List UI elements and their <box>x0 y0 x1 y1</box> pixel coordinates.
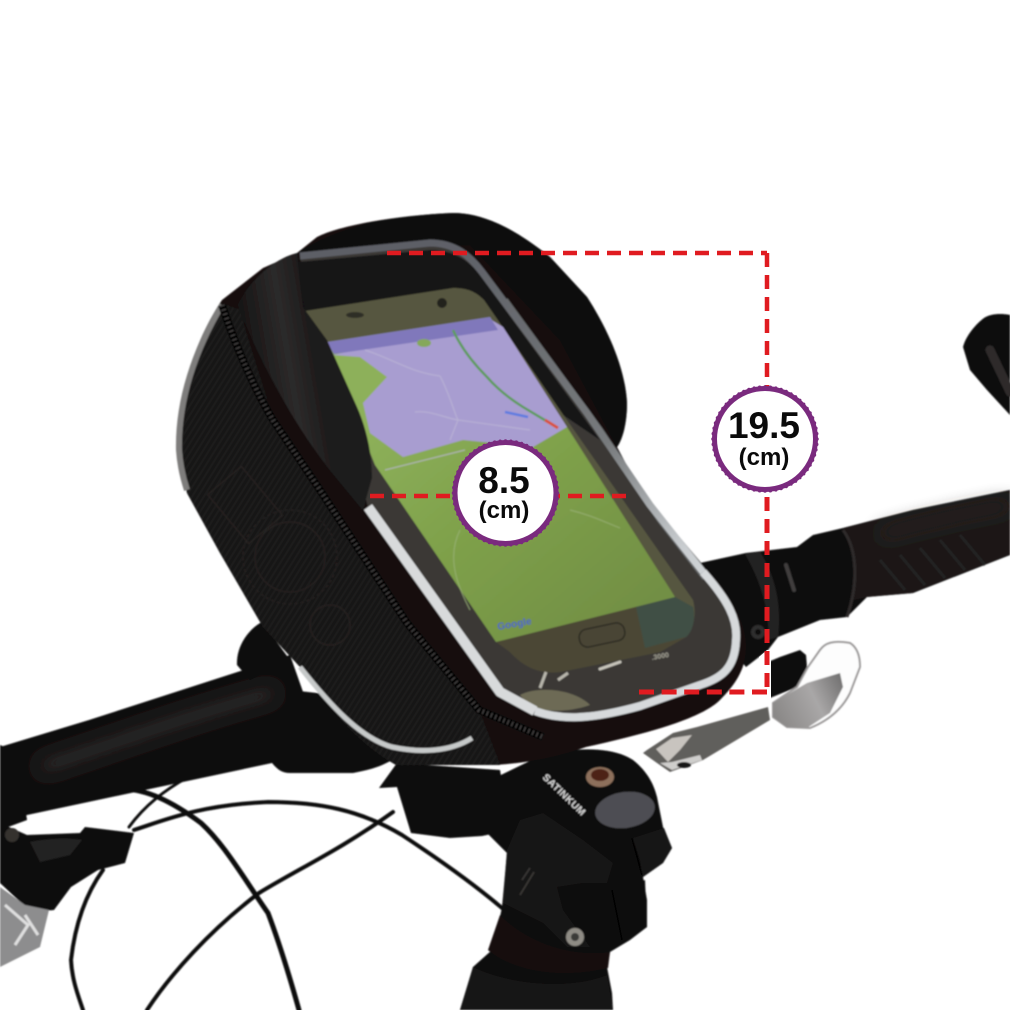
embossed logo <box>208 466 350 645</box>
stem engraved text <box>520 868 534 895</box>
window interior <box>300 245 733 713</box>
badge: width 8.5 cm: 8.5 <box>478 460 530 501</box>
stem bolt <box>566 928 584 946</box>
stem upper clamp <box>633 828 672 877</box>
badge: width 8.5 cm: (cm) <box>479 497 529 524</box>
stem cap disc <box>593 788 657 832</box>
blue route <box>505 412 528 417</box>
stem neck <box>488 915 610 973</box>
google logo: Google <box>497 616 533 633</box>
red route <box>545 420 558 428</box>
badge: width 8.5 cm <box>454 441 558 545</box>
grip highlight <box>880 505 1010 535</box>
bag body <box>177 213 746 765</box>
stem lower clamp <box>610 880 647 940</box>
front camera <box>437 298 447 308</box>
faint green roads <box>454 510 620 610</box>
phone body <box>305 288 695 672</box>
dark mesh above phone <box>298 250 600 440</box>
stem brand text: SATINKUM <box>540 772 587 819</box>
grip <box>843 490 1010 600</box>
window right shine <box>505 300 705 578</box>
right brake lever end <box>963 314 1010 415</box>
green route <box>453 330 548 422</box>
silver lever arm <box>643 707 770 772</box>
earpiece <box>346 312 364 318</box>
map water area <box>333 319 567 457</box>
brake cables <box>71 777 502 1010</box>
phone text mark: .3000 <box>651 652 670 662</box>
map roads <box>365 350 530 470</box>
left mount knob <box>237 622 290 680</box>
phone speaker glint <box>600 662 620 669</box>
phone chin right <box>636 597 694 648</box>
badge: height 19.5 cm: 19.5 <box>728 405 800 446</box>
window reflection debris <box>520 690 590 711</box>
phone bottom chin <box>496 597 694 672</box>
bottom reflective stripe <box>300 667 472 750</box>
mount strap below bag <box>379 763 510 838</box>
phone bag <box>177 213 746 765</box>
sun visor <box>300 213 627 447</box>
stem arm <box>503 813 613 947</box>
zipper <box>222 305 543 737</box>
left handlebar <box>0 655 320 825</box>
left side highlight <box>179 305 222 490</box>
window rim <box>300 243 736 717</box>
height dimension bracket <box>387 251 767 255</box>
collar ring <box>843 530 855 617</box>
left brake shifter <box>0 823 134 967</box>
phone side glint <box>540 672 568 688</box>
phone <box>305 288 695 688</box>
photo: bicycle handlebar with phone bag <box>0 213 1010 1010</box>
status bar <box>327 317 498 354</box>
grip texture <box>880 535 985 590</box>
clamp knob highlight <box>786 565 794 590</box>
top strap <box>238 253 372 510</box>
screen <box>327 317 675 642</box>
handlebar left ring <box>0 745 27 830</box>
white gap beside lever <box>757 650 771 702</box>
right handlebar and grip <box>700 490 1010 667</box>
black brake lever <box>768 650 807 698</box>
silver brake lever <box>773 642 860 728</box>
badge: height 19.5 cm: (cm) <box>739 444 789 471</box>
green park top <box>417 339 431 347</box>
stem cap bolt <box>586 767 614 787</box>
stem <box>460 749 672 1010</box>
handlebar clamp <box>272 690 392 773</box>
stem lower tube <box>460 967 613 1010</box>
home button <box>578 621 626 649</box>
width dimension line <box>370 494 632 498</box>
dimension lines <box>370 253 767 692</box>
badge: height 19.5 cm <box>713 387 817 491</box>
stem clamp details <box>612 838 642 940</box>
carbon side panel <box>182 305 500 765</box>
